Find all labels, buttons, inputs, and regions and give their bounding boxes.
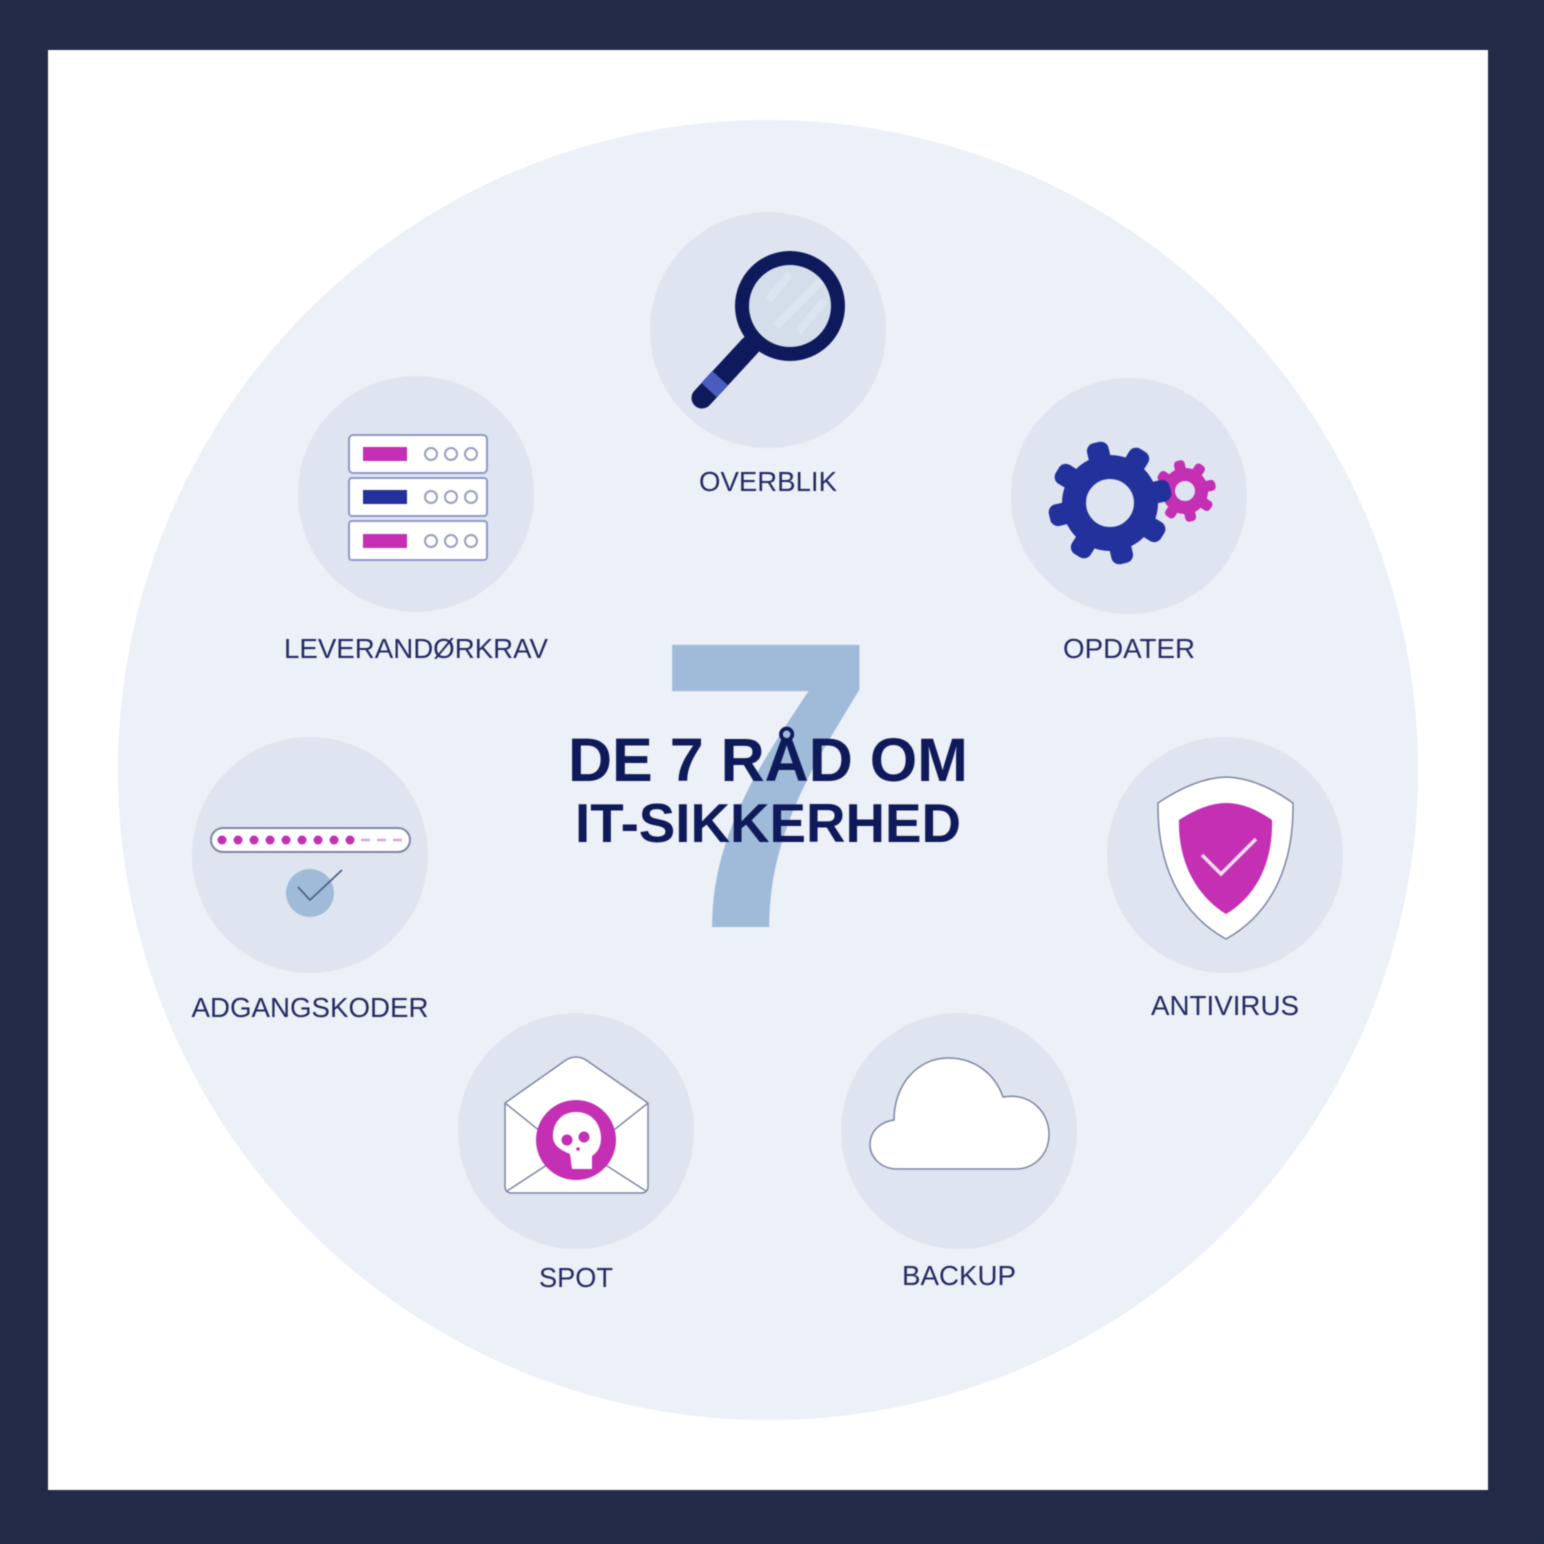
item: opdater <box>1011 378 1247 664</box>
label: overblik: OVERBLIK <box>699 466 837 497</box>
label: leverandørkrav: LEVERANDØRKRAV <box>284 633 548 664</box>
icon: shield <box>1158 777 1293 939</box>
big numeral 7: 7 <box>655 556 877 1014</box>
icon: server rack <box>349 435 487 560</box>
icon: skull badge <box>536 1100 616 1180</box>
icon: large blue gear <box>1047 440 1173 566</box>
item: backup <box>841 1013 1077 1291</box>
panel: large background circle <box>118 120 1418 1420</box>
item: leverandørkrav <box>284 376 548 664</box>
icon: envelope <box>505 1057 648 1193</box>
label: opdater: OPDATER <box>1063 633 1195 664</box>
title: IT-SIKKERHED <box>575 792 961 854</box>
item: spot <box>458 1013 694 1293</box>
label: spot: SPOT <box>539 1262 613 1293</box>
title: DE 7 RÅD OM <box>568 726 968 794</box>
item: overblik <box>650 212 886 497</box>
icon: password field <box>211 828 410 852</box>
label: adgangskoder: ADGANGSKODER <box>192 992 428 1023</box>
label: backup: BACKUP <box>902 1260 1016 1291</box>
item: adgangskoder <box>192 737 428 1023</box>
icon: small magenta gear <box>1154 460 1216 522</box>
icon: cloud <box>870 1058 1049 1169</box>
icon: magnifying glass <box>702 258 838 398</box>
item: antivirus <box>1107 737 1343 1021</box>
title <box>568 726 968 854</box>
label: antivirus: ANTIVIRUS <box>1151 990 1299 1021</box>
icon: check badge <box>286 869 342 917</box>
